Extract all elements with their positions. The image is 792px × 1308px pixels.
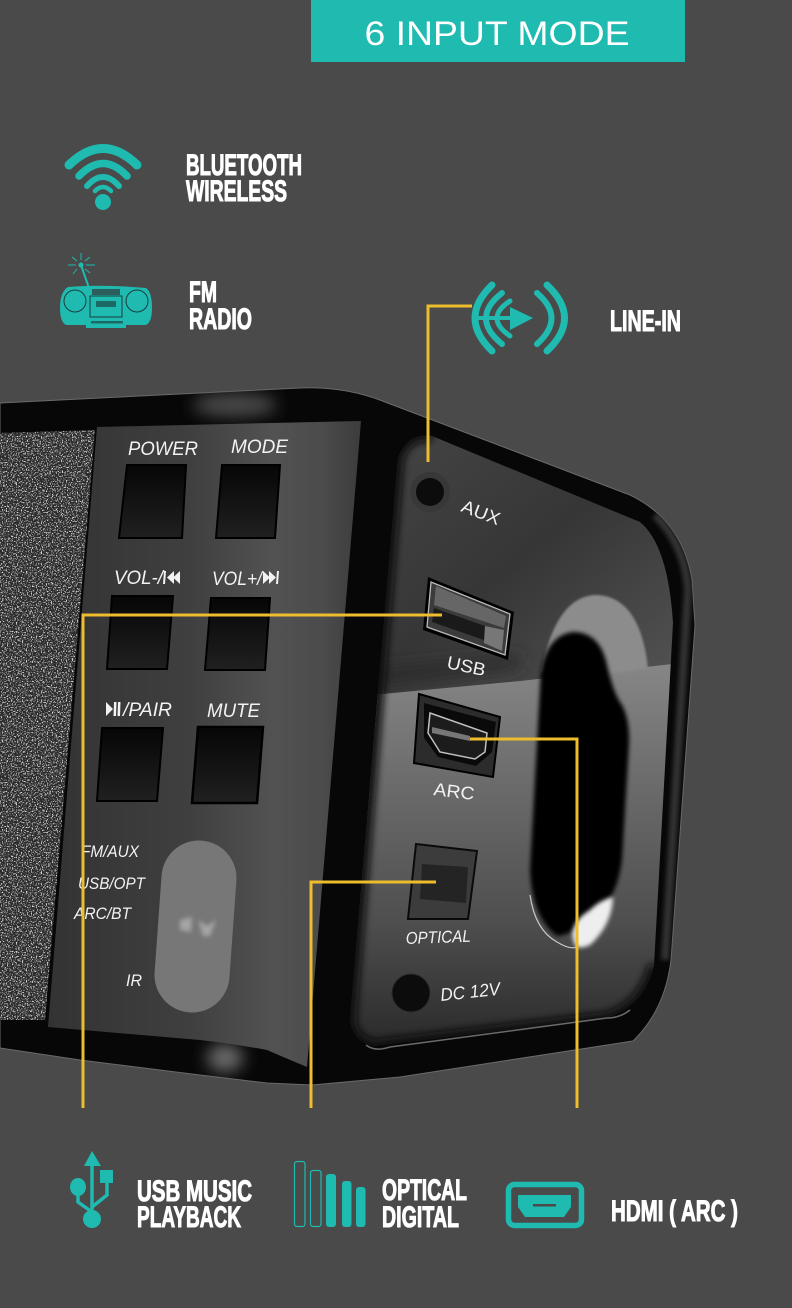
title banner — [311, 0, 685, 62]
plate rim highlight — [366, 1010, 630, 1049]
button labels: /PAIR — [121, 700, 172, 721]
port: usb — [423, 577, 514, 660]
port: optical — [408, 844, 477, 919]
label: usb music playback — [137, 1175, 252, 1234]
label: bluetooth wireless — [186, 149, 302, 208]
port labels: ARC — [433, 779, 476, 804]
icon: optical bars — [294, 1162, 366, 1227]
label: hdmi arc: HDMI ( ARC ) — [611, 1195, 738, 1228]
port labels: OPTICAL — [405, 927, 471, 948]
button: mute — [192, 727, 263, 803]
label: bluetooth wireless: WIRELESS — [186, 175, 287, 208]
port: hdmi — [414, 694, 500, 777]
connector plate — [340, 425, 685, 1050]
button: power — [119, 465, 186, 538]
label: fm radio: FM — [189, 276, 217, 309]
button: play pair — [97, 728, 163, 801]
title banner: 6 INPUT MODE — [364, 15, 630, 53]
connector line: optical — [311, 882, 436, 1108]
label: bluetooth wireless: BLUETOOTH — [186, 149, 302, 182]
label: optical digital — [382, 1174, 467, 1234]
ir sensor window — [180, 878, 216, 975]
mode and ir labels: FM/AUX — [81, 843, 140, 861]
port labels: AUX — [459, 496, 503, 529]
label: line-in: LINE-IN — [610, 305, 681, 338]
label: usb music playback: USB MUSIC — [137, 1175, 252, 1208]
port labels — [405, 496, 503, 1005]
connector line: usb — [83, 615, 442, 1108]
slot recess — [530, 595, 648, 948]
icon: fm radio — [60, 253, 152, 328]
soundbar product — [0, 388, 695, 1085]
button labels: VOL-/ — [114, 568, 165, 589]
button labels: MUTE — [207, 701, 260, 722]
label: fm radio — [189, 276, 252, 336]
button labels: VOL+/ — [212, 569, 264, 590]
port labels: DC 12V — [439, 979, 503, 1005]
port: dc 12v — [392, 974, 430, 1012]
button: vol plus — [205, 598, 270, 670]
connector line: aux to line-in — [428, 306, 472, 462]
label: fm radio: RADIO — [189, 303, 252, 336]
label: optical digital: DIGITAL — [382, 1201, 459, 1234]
button: mode — [216, 465, 280, 538]
icon: wifi bluetooth — [69, 148, 137, 210]
mode and ir labels: ARC/BT — [73, 905, 133, 923]
body highlights — [193, 393, 688, 1072]
mode and ir labels: USB/OPT — [78, 875, 147, 893]
label: optical digital: OPTICAL — [382, 1174, 467, 1207]
icon: usb — [70, 1151, 113, 1228]
port: aux — [410, 472, 450, 512]
speaker grille — [0, 425, 100, 1025]
icon: hdmi — [508, 1184, 582, 1226]
media glyphs — [106, 571, 279, 716]
button labels: POWER — [128, 439, 198, 460]
mode and ir labels: IR — [126, 972, 142, 990]
soundbar body — [0, 388, 695, 1085]
button labels: MODE — [231, 437, 288, 458]
button: vol minus — [107, 596, 173, 669]
label: usb music playback: PLAYBACK — [137, 1201, 241, 1234]
button panel — [48, 421, 361, 1067]
connector line: hdmi — [470, 739, 577, 1108]
icon: line-in — [475, 285, 564, 351]
button labels — [114, 437, 288, 722]
port labels: USB — [445, 652, 487, 680]
mode and ir labels — [73, 843, 147, 990]
